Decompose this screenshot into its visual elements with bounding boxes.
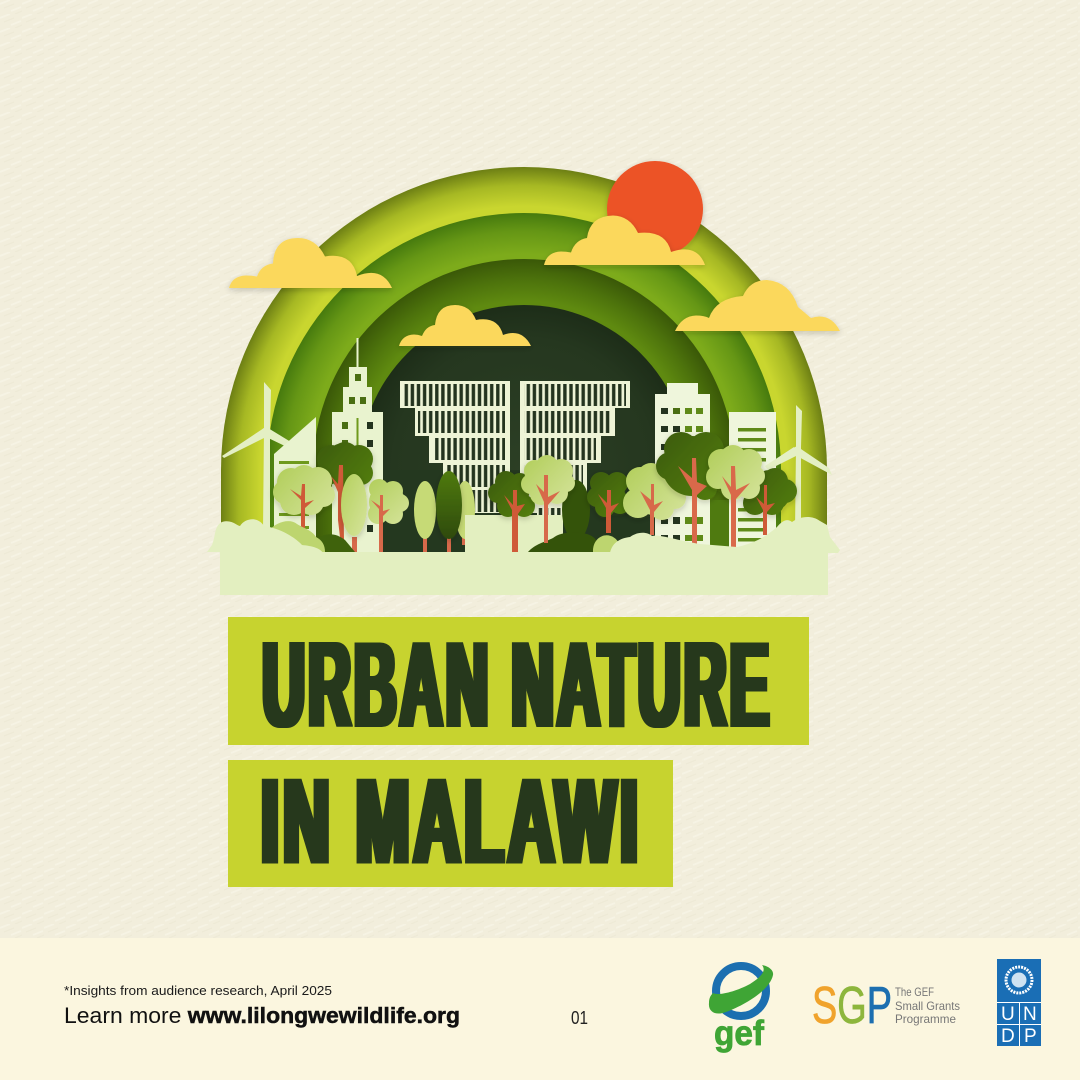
tree: light, centre right: [623, 463, 686, 535]
footer band: [0, 938, 1080, 1080]
tree: dark, centre: [488, 471, 535, 552]
logo: SGP: SGP: [812, 977, 892, 1035]
sun: [607, 161, 703, 257]
cloud: center: [399, 305, 531, 346]
tree: light, left: [273, 465, 335, 530]
logo: UNDP: P: [1024, 1026, 1037, 1047]
title block: line one: URBAN NATURE: [262, 617, 772, 753]
pale ground rise behind central trees: [465, 515, 563, 552]
learn more link: Learn more www.lilongwewildlife.org: [64, 1003, 460, 1028]
wind turbine: right: [765, 405, 832, 530]
tall tower: left: [332, 338, 383, 552]
oval tree: left: [341, 474, 367, 552]
illustration: paper-cut city in arches: [207, 160, 840, 595]
low shrub: right of centre: [593, 535, 620, 552]
central twin tower: left: [400, 381, 510, 513]
logo: UNDP: [997, 959, 1041, 1047]
bush and dark oval: centre: [528, 480, 602, 552]
cloud: upper left: [229, 238, 392, 288]
cloud: over the sun: [544, 216, 705, 265]
tree: light, right: [706, 445, 765, 552]
logo: SGP: [812, 977, 960, 1035]
block building: right: [655, 383, 710, 552]
logo: UNDP: D: [1001, 1026, 1015, 1047]
logo: UNDP: N: [1023, 1004, 1037, 1025]
angled building: [274, 417, 316, 552]
cloud: right: [675, 280, 840, 331]
tree: light, beside tower: [368, 479, 409, 552]
page number: 01: [571, 1008, 588, 1028]
rainbow arches: [221, 167, 827, 552]
logo: SGP: The GEF: [895, 985, 934, 999]
tree: dark, centre right: [587, 472, 631, 533]
ground with bushes: [207, 517, 840, 595]
tree: dark, large right: [656, 432, 728, 552]
logo: SGP: Small Grants: [895, 999, 960, 1013]
logo: GEF: gef: [714, 1014, 764, 1053]
striped building: right: [729, 412, 776, 552]
tree: dark, far right: [743, 468, 797, 535]
title block: line two: IN MALAWI: [261, 753, 642, 889]
tree: light, centre: [521, 455, 575, 543]
central twin tower: right: [520, 381, 630, 515]
oval trees: centre group: [414, 471, 475, 552]
logo: GEF: [709, 965, 773, 1053]
footnote: *Insights from audience research, April 2025: [64, 983, 332, 998]
logo: SGP: Programme: [895, 1012, 956, 1026]
low shrubs: left: [268, 521, 355, 552]
wind turbine: left: [222, 382, 310, 530]
tree: dark, behind left: [316, 442, 373, 546]
logo: UNDP: U: [1001, 1004, 1015, 1025]
green gap panel: [710, 500, 729, 552]
